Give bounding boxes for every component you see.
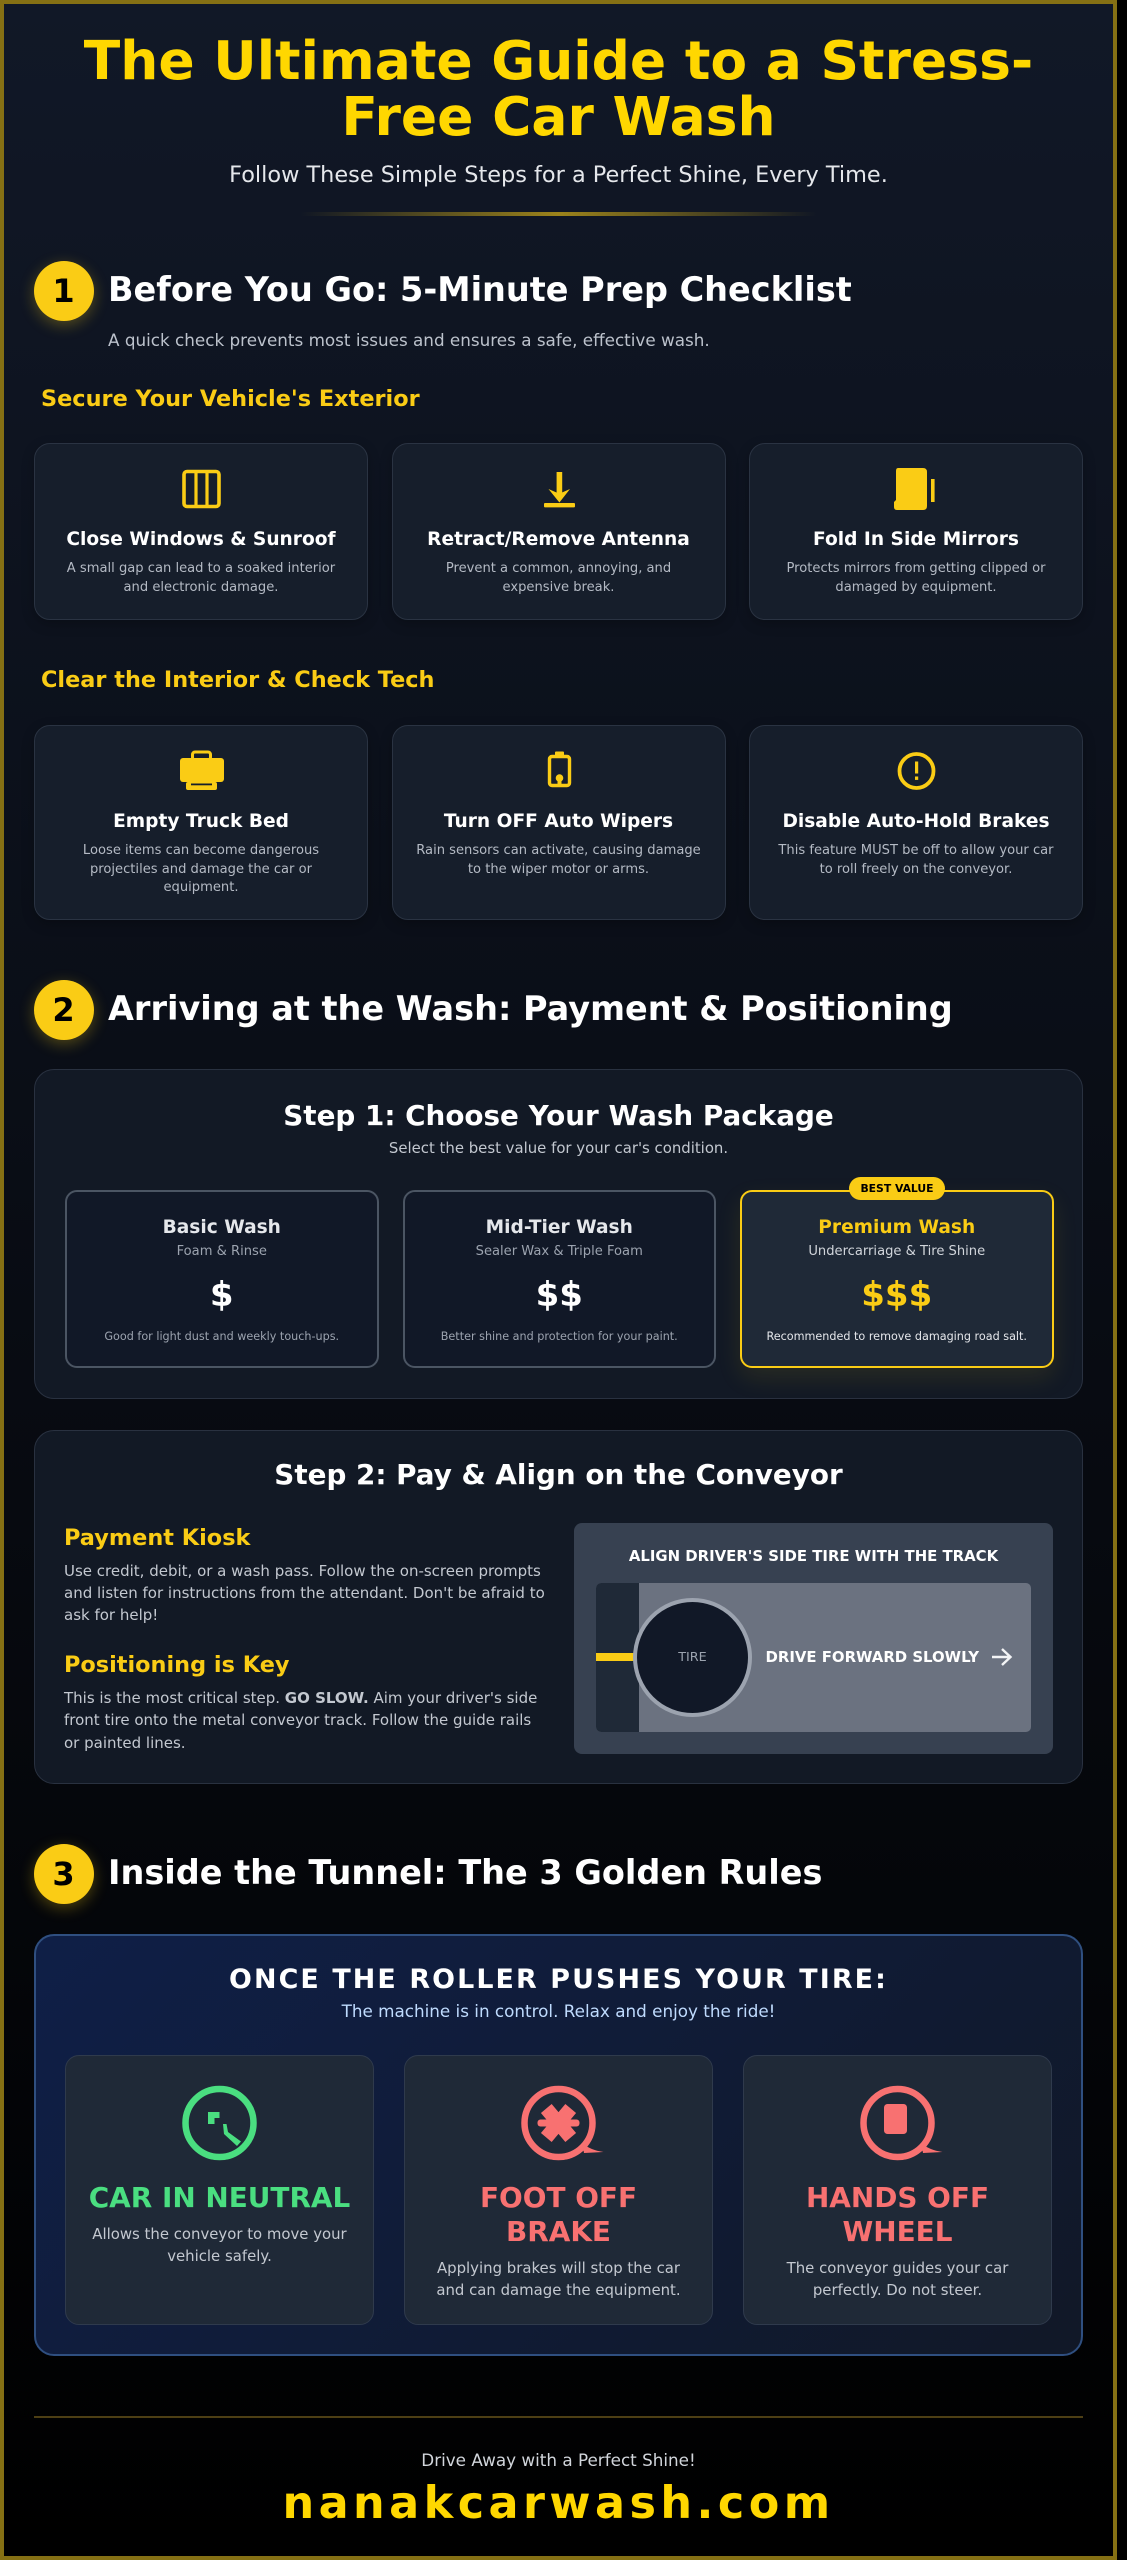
step 2 heading: Step 2: Pay & Align on the Conveyor xyxy=(274,1458,843,1491)
positioning text: or painted lines. xyxy=(64,1734,186,1752)
diagram heading: ALIGN DRIVER'S SIDE TIRE WITH THE TRACK xyxy=(629,1547,998,1565)
icon: briefcase xyxy=(180,750,224,790)
section 3 number badge xyxy=(34,1844,94,1904)
card text xyxy=(786,561,1046,595)
rule text: The conveyor guides your car xyxy=(787,2259,1008,2277)
subheading: interior: Clear the Interior & Check Tech xyxy=(41,667,434,693)
rules subtext: The machine is in control. Relax and enjoy the ride! xyxy=(342,2000,775,2020)
arrow xyxy=(992,1648,1012,1666)
package: basic xyxy=(65,1190,378,1368)
payment heading: Payment Kiosk xyxy=(64,1525,250,1551)
rule text xyxy=(436,2259,681,2299)
card text xyxy=(66,561,336,595)
title xyxy=(84,29,1033,148)
package contents: Undercarriage & Tire Shine xyxy=(808,1244,985,1259)
tire: TIRE xyxy=(678,1650,707,1665)
card: close windows xyxy=(34,443,368,620)
card: mirrors xyxy=(749,443,1083,620)
rule text: perfectly. Do not steer. xyxy=(813,2281,982,2299)
rule text: and can damage the equipment. xyxy=(436,2281,681,2299)
card: antenna xyxy=(392,443,726,620)
payment text: and listen for instructions from the attendant. Don't be afraid to xyxy=(64,1584,545,1602)
package name: Basic Wash xyxy=(163,1217,281,1238)
section 2 number badge xyxy=(34,980,94,1040)
positioning text: This is the most critical step. GO SLOW. Aim your driver's side xyxy=(64,1689,537,1707)
section 3 number badge: 3 xyxy=(52,1855,75,1893)
payment text xyxy=(64,1562,545,1624)
card text: This feature MUST be off to allow your car xyxy=(778,843,1054,858)
card text: to roll freely on the conveyor. xyxy=(820,862,1012,877)
footer tagline: Drive Away with a Perfect Shine! xyxy=(421,2450,696,2470)
rule heading: BRAKE xyxy=(506,2215,611,2248)
card text: A small gap can lead to a soaked interior xyxy=(67,561,335,576)
package note: Recommended to remove damaging road salt. xyxy=(766,1330,1027,1343)
package note: Good for light dust and weekly touch-ups. xyxy=(104,1330,339,1343)
header divider xyxy=(300,212,817,216)
section 2 heading: Arriving at the Wash: Payment & Positioning xyxy=(108,989,953,1028)
section 3 heading: Inside the Tunnel: The 3 Golden Rules xyxy=(108,1853,822,1892)
card heading: Close Windows & Sunroof xyxy=(66,529,336,550)
best value badge: BEST VALUE xyxy=(860,1182,934,1195)
rules heading: ONCE THE ROLLER PUSHES YOUR TIRE: xyxy=(229,1964,888,1995)
card heading: Empty Truck Bed xyxy=(113,811,289,832)
rule: brake xyxy=(404,2055,713,2325)
best value badge xyxy=(849,1177,945,1200)
package name: Mid-Tier Wash xyxy=(486,1217,633,1238)
card: truck bed xyxy=(34,725,368,920)
icon: phone sensor xyxy=(548,752,572,788)
rule text: Applying brakes will stop the car xyxy=(437,2259,680,2277)
card text: and electronic damage. xyxy=(124,580,278,595)
tire xyxy=(633,1598,752,1717)
card text: equipment. xyxy=(163,880,239,895)
price: $$ xyxy=(536,1275,583,1315)
card text: Loose items can become dangerous xyxy=(83,843,319,858)
card text: Rain sensors can activate, causing damage xyxy=(416,843,701,858)
icon: gear dial xyxy=(182,2086,257,2160)
track surface xyxy=(596,1583,1031,1732)
alignment marker xyxy=(596,1653,636,1661)
payment text: ask for help! xyxy=(64,1606,158,1624)
conveyor strip xyxy=(596,1583,639,1732)
rule: wheel xyxy=(743,2055,1052,2325)
card text: projectiles and damage the car or xyxy=(90,862,312,877)
subheading: exterior: Secure Your Vehicle's Exterior xyxy=(41,386,420,412)
icon: hands off wheel xyxy=(860,2086,942,2160)
alignment diagram xyxy=(574,1523,1053,1754)
section 2 number badge: 2 xyxy=(52,991,75,1029)
card text: to the wiper motor or arms. xyxy=(468,862,649,877)
rule text: Allows the conveyor to move your xyxy=(92,2225,347,2243)
card text xyxy=(446,561,671,595)
positioning text xyxy=(64,1689,537,1752)
rule heading: HANDS OFF xyxy=(806,2181,989,2214)
card: brakes xyxy=(749,725,1083,920)
panel: step 2 xyxy=(34,1430,1083,1784)
package name: Premium Wash xyxy=(818,1217,975,1238)
title: Free Car Wash xyxy=(341,85,776,148)
rule heading: WHEEL xyxy=(842,2215,952,2248)
rule heading xyxy=(806,2181,989,2248)
card heading: Retract/Remove Antenna xyxy=(427,529,690,550)
footer divider xyxy=(34,2416,1083,2418)
rule text: vehicle safely. xyxy=(167,2247,272,2265)
card text xyxy=(83,843,319,895)
positioning heading: Positioning is Key xyxy=(64,1652,289,1678)
package contents: Sealer Wax & Triple Foam xyxy=(476,1244,643,1259)
icon: antenna down arrow xyxy=(544,472,575,508)
card text xyxy=(416,843,701,877)
package note: Better shine and protection for your paint. xyxy=(441,1330,678,1343)
panel: step 1 packages xyxy=(34,1069,1083,1399)
positioning text: front tire onto the metal conveyor track. Follow the guide rails xyxy=(64,1711,531,1729)
card text xyxy=(778,843,1054,877)
package contents: Foam & Rinse xyxy=(177,1244,267,1259)
subtitle: Follow These Simple Steps for a Perfect Shine, Every Time. xyxy=(229,162,888,188)
package: premium xyxy=(740,1190,1054,1368)
payment text: Use credit, debit, or a wash pass. Follow the on-screen prompts xyxy=(64,1562,541,1580)
drive forward label: DRIVE FORWARD SLOWLY xyxy=(766,1648,979,1666)
section 1 intro: A quick check prevents most issues and ensures a safe, effective wash. xyxy=(108,330,710,350)
rule: neutral xyxy=(65,2055,374,2325)
panel: golden rules xyxy=(34,1934,1083,2356)
section 1 heading: Before You Go: 5-Minute Prep Checklist xyxy=(108,270,852,309)
card text: expensive break. xyxy=(503,580,614,595)
card: wipers xyxy=(392,725,726,920)
icon: brake warning xyxy=(521,2086,604,2160)
card heading: Disable Auto-Hold Brakes xyxy=(782,811,1050,832)
title: The Ultimate Guide to a Stress- xyxy=(84,29,1033,92)
card text: Protects mirrors from getting clipped or xyxy=(786,561,1046,576)
step 1 subtext: Select the best value for your car's condition. xyxy=(389,1139,728,1157)
price: $$$ xyxy=(861,1275,932,1315)
card text: damaged by equipment. xyxy=(835,580,997,595)
card heading: Turn OFF Auto Wipers xyxy=(444,811,673,832)
icon: exclamation circle xyxy=(898,752,936,790)
rule text xyxy=(786,2259,1008,2299)
rule heading xyxy=(480,2181,637,2248)
icon: window xyxy=(182,470,221,508)
step 1 heading: Step 1: Choose Your Wash Package xyxy=(283,1099,834,1132)
rule text xyxy=(92,2225,347,2265)
website: nanakcarwash.com xyxy=(282,2478,835,2529)
card heading: Fold In Side Mirrors xyxy=(813,529,1019,550)
package: mid-tier xyxy=(402,1190,716,1368)
price: $ xyxy=(210,1275,234,1315)
section 1 number badge xyxy=(34,260,94,320)
card text: Prevent a common, annoying, and xyxy=(446,561,671,576)
rule heading: CAR IN NEUTRAL xyxy=(89,2181,350,2214)
icon: mirror xyxy=(894,468,935,510)
section 1 number badge: 1 xyxy=(52,272,75,310)
rule heading: FOOT OFF xyxy=(480,2181,637,2214)
